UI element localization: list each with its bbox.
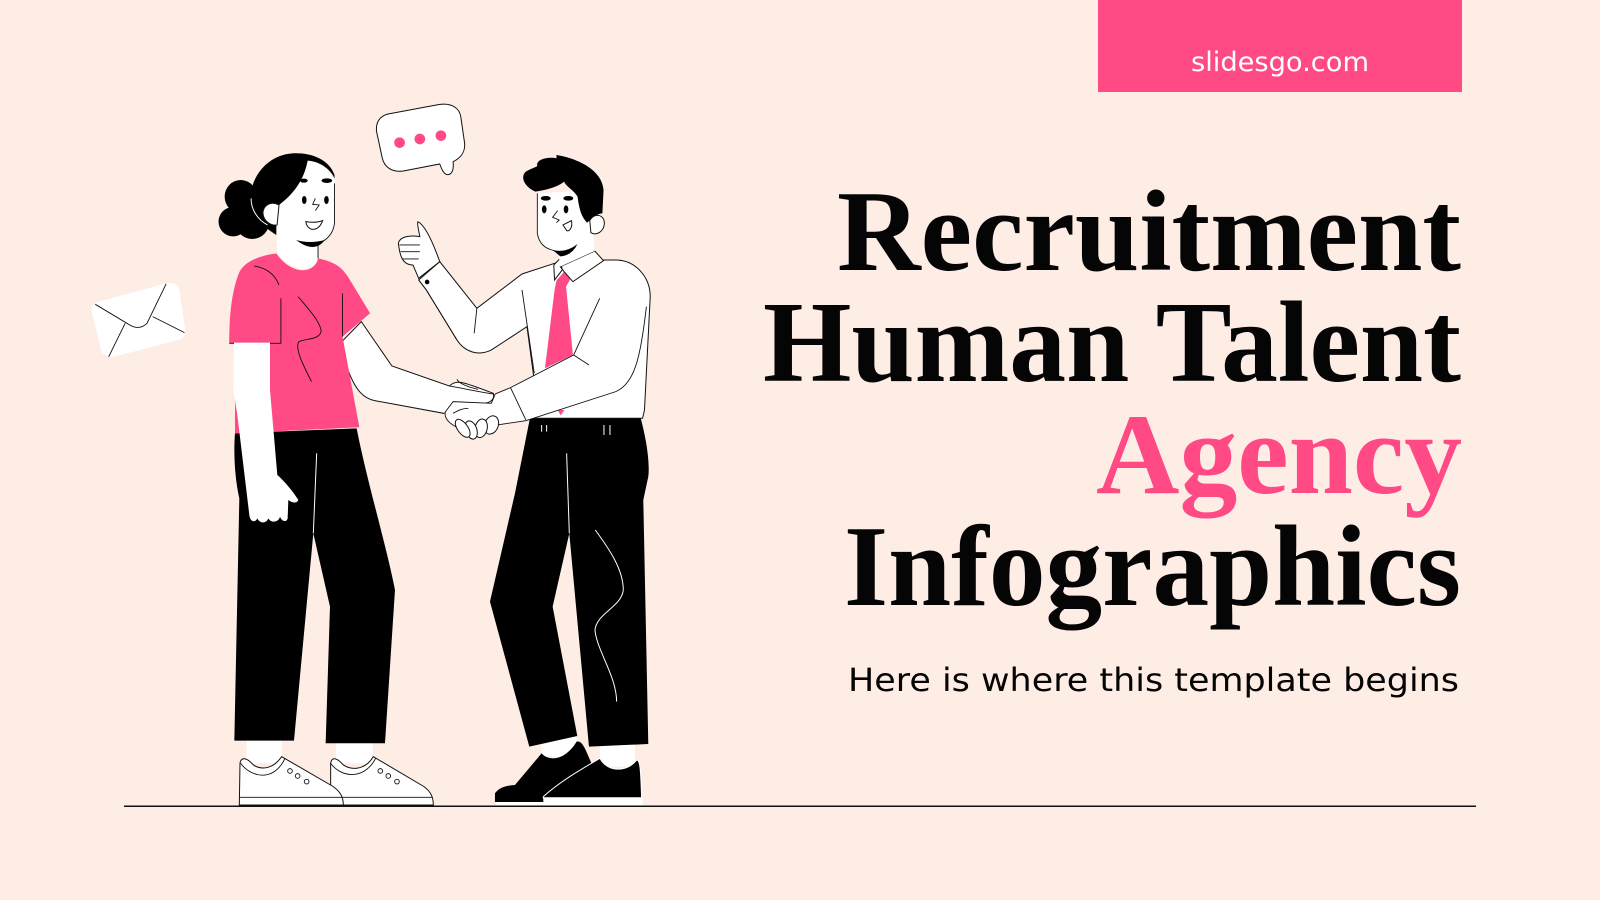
thumbs-up hand <box>398 222 440 278</box>
website tag <box>1098 0 1462 92</box>
title: Agency <box>1096 391 1462 518</box>
necktie <box>545 272 573 368</box>
title: Recruitment <box>837 168 1461 295</box>
title <box>763 168 1462 630</box>
woman hanging arm and hand <box>233 343 298 522</box>
man head <box>537 190 595 267</box>
woman trousers and sneakers <box>234 428 433 805</box>
handshake sleeve and hand <box>445 307 646 438</box>
shirt collar <box>554 251 604 282</box>
title: Human Talent <box>763 279 1461 406</box>
man figure <box>398 155 650 805</box>
icon: envelope <box>91 283 185 357</box>
title: Infographics <box>844 503 1461 630</box>
ground line <box>124 806 1476 807</box>
man shirt, arms and hands <box>398 155 650 440</box>
website tag: slidesgo.com <box>1191 47 1369 78</box>
woman figure <box>219 153 494 805</box>
subtitle: Here is where this template begins <box>848 661 1459 699</box>
man trousers and shoes <box>490 418 649 805</box>
icon: speech bubble <box>376 104 465 175</box>
woman upper body and head <box>219 153 494 433</box>
